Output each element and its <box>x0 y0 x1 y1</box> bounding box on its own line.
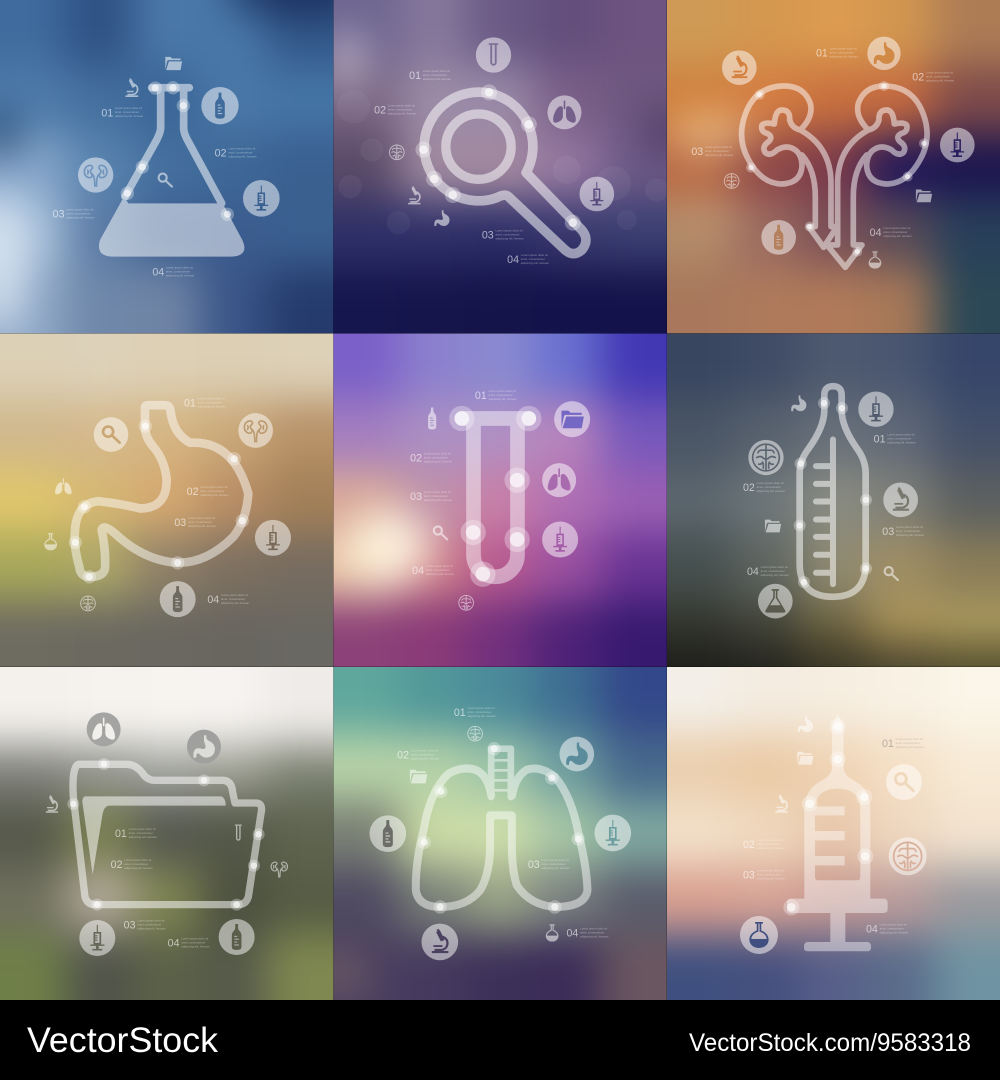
text: 04: amet, consectetuer <box>880 927 904 931</box>
diagram: test tube <box>462 418 529 577</box>
text: 03: amet, consectetuer <box>896 529 920 533</box>
text: 02: 02 <box>410 452 422 464</box>
text: 04: 04 <box>168 938 180 950</box>
text: 04 <box>870 226 912 239</box>
text: 01: amet, consectetuer <box>115 110 139 114</box>
text: 03: amet, consectetuer <box>188 520 212 524</box>
text: 02: Lorem ipsum dolor sit <box>926 70 953 74</box>
icon: brain <box>459 595 473 610</box>
icon: microscope <box>125 78 138 97</box>
text: 01: 01 <box>101 107 113 119</box>
diagram: syringe <box>787 714 888 951</box>
text: 01: amet, consectetuer <box>467 710 492 714</box>
icon: stomach <box>434 210 450 226</box>
text: 04: amet, consectetuer <box>580 930 604 934</box>
text: 02 <box>111 858 153 871</box>
nodes <box>415 84 581 231</box>
text: 03: Lorem ipsum dolor sit <box>495 229 523 233</box>
text: 04: adipiscing elit. Aenean <box>181 945 210 949</box>
text: 02: Lorem ipsum dolor sit <box>200 485 228 489</box>
badge: syringe <box>594 815 631 851</box>
icon: brain <box>389 145 404 160</box>
icon: stomach <box>798 716 813 732</box>
text: 01: amet, consectetuer <box>129 831 153 835</box>
text: 03: Lorem ipsum dolor sit <box>896 525 923 529</box>
text: 02: Lorem ipsum dolor sit <box>228 146 256 150</box>
text: 04: Lorem ipsum dolor sit <box>880 923 907 927</box>
text: 01: amet, consectetuer <box>887 436 911 440</box>
text: 03: adipiscing elit. Aenean <box>424 498 452 502</box>
text: 02: amet, consectetuer <box>926 74 950 78</box>
badge: test tube <box>476 37 511 73</box>
text: 02: 02 <box>111 859 123 871</box>
text: 03: Lorem ipsum dolor sit <box>137 919 165 923</box>
text: 03: Lorem ipsum dolor sit <box>541 858 569 862</box>
text: 03: amet, consectetuer <box>541 862 566 866</box>
icon: test tube <box>235 824 242 841</box>
text: 03: 03 <box>124 920 136 932</box>
text: 04: adipiscing elit. Aenean <box>426 572 454 576</box>
text: 04: Lorem ipsum dolor sit <box>221 593 248 597</box>
text: 03 <box>528 858 570 871</box>
text: 02: 02 <box>743 482 755 494</box>
text: 04 <box>566 926 609 939</box>
text: 02: 02 <box>743 839 755 851</box>
icon: microscope <box>775 795 788 813</box>
text: 03: 03 <box>882 526 894 538</box>
text: 03 <box>691 145 734 158</box>
text: 04: amet, consectetuer <box>166 270 190 274</box>
text: 01: adipiscing elit. Aenean <box>423 77 451 81</box>
text: 01: amet, consectetuer <box>198 400 222 404</box>
text: 02 <box>374 104 416 115</box>
badge: thermometer <box>219 919 255 955</box>
text: 04: Lorem ipsum dolor sit <box>166 266 193 270</box>
panel: lungs timeline <box>234 567 767 1080</box>
text: 01: Lorem ipsum dolor sit <box>115 106 142 110</box>
text: 02 <box>912 70 955 83</box>
text: 01: 01 <box>475 390 487 402</box>
text: 01: 01 <box>874 433 886 445</box>
icon: magnifier <box>159 174 172 187</box>
diagram: folder <box>73 764 262 905</box>
background: violet blur <box>234 234 767 767</box>
nodes <box>69 419 249 583</box>
text: 01: amet, consectetuer <box>423 73 447 77</box>
text: 01: Lorem ipsum dolor sit <box>423 69 450 73</box>
badge: microscope <box>883 482 918 517</box>
text: 01: amet, consectetuer <box>830 51 854 55</box>
text: 02: Lorem ipsum dolor sit <box>411 748 438 752</box>
text: 03 <box>410 490 452 503</box>
badge: kidneys <box>238 413 273 448</box>
text: 04: Lorem ipsum dolor sit <box>521 253 548 257</box>
text: 04 <box>508 254 549 264</box>
text: 02: amet, consectetuer <box>200 489 224 493</box>
panel: magnifier timeline <box>334 0 667 334</box>
text: 01: Lorem ipsum dolor sit <box>896 737 923 741</box>
icon: folder <box>410 770 427 783</box>
text: 01: amet, consectetuer <box>896 741 920 745</box>
badge: lungs <box>87 712 121 746</box>
text: 03: amet, consectetuer <box>705 149 729 153</box>
badge: folder <box>554 401 590 437</box>
text: 02: amet, consectetuer <box>757 485 781 489</box>
text: 01 <box>816 47 858 60</box>
text: 02: adipiscing elit. Aenean <box>228 154 257 158</box>
text: 03: Lorem ipsum dolor sit <box>757 869 784 873</box>
text: 01 <box>874 432 916 445</box>
text: 04: amet, consectetuer <box>221 597 245 601</box>
text: 04: 04 <box>507 254 519 266</box>
text: 01: 01 <box>882 738 894 750</box>
text: 04 <box>866 923 908 936</box>
badge: syringe <box>858 391 894 427</box>
text: 04 <box>168 937 210 950</box>
badge: magnifier <box>886 764 922 800</box>
text: 02: Lorem ipsum dolor sit <box>388 104 415 108</box>
text: 02 <box>187 485 229 498</box>
text: 02: amet, consectetuer <box>411 752 435 756</box>
text: 03: amet, consectetuer <box>137 923 161 927</box>
panel: thermometer timeline <box>567 234 1000 767</box>
text: 03: Lorem ipsum dolor sit <box>188 516 215 520</box>
footer: black watermark bar <box>0 1000 1000 1080</box>
text: 02: Lorem ipsum dolor sit <box>124 858 152 862</box>
text: 02 <box>743 481 785 494</box>
text: 01 <box>410 70 451 80</box>
text: 03 <box>174 516 217 529</box>
badge: brain <box>889 837 927 875</box>
background: blue blur <box>0 0 334 334</box>
badge: flask <box>758 584 793 618</box>
text: 03: 03 <box>691 146 703 158</box>
icon: folder <box>797 752 813 765</box>
text: 03: 03 <box>743 870 755 882</box>
text: 02 <box>410 451 452 464</box>
text: 04: 04 <box>747 566 759 578</box>
text: 04: adipiscing elit. Aenean <box>221 601 250 605</box>
text: 02: adipiscing elit. Aenean <box>757 489 785 493</box>
icon: lungs <box>55 478 72 494</box>
text: 04: Lorem ipsum dolor sit <box>761 565 788 569</box>
text: 03 <box>743 869 785 882</box>
text: 03: 03 <box>174 517 186 529</box>
text: 02: 02 <box>374 105 386 117</box>
icon: brain <box>81 596 95 611</box>
text: 03: 03 <box>482 230 494 242</box>
text: 03: Lorem ipsum dolor sit <box>424 490 451 494</box>
text: 01 <box>115 827 157 840</box>
background: orange blur <box>667 0 1000 334</box>
badge: thermometer <box>761 220 796 255</box>
icon: kidneys <box>271 862 287 877</box>
badge: syringe <box>579 177 614 211</box>
text: 01 <box>454 706 496 719</box>
icon: stomach <box>791 395 806 411</box>
badge: stomach <box>187 730 221 764</box>
text: 01: adipiscing elit. Aenean <box>887 440 916 444</box>
text: 02 <box>215 148 256 158</box>
text: 02: adipiscing elit. Aenean <box>424 459 452 463</box>
text: 02: adipiscing elit. Aenean <box>124 866 153 870</box>
text: 04: Lorem ipsum dolor sit <box>426 564 453 568</box>
footer brand: VectorStock <box>27 1021 219 1060</box>
panel: flask timeline <box>0 0 334 334</box>
badge: syringe <box>542 521 578 557</box>
icon: flask <box>546 924 558 942</box>
text: 02: amet, consectetuer <box>424 455 448 459</box>
text: 04: amet, consectetuer <box>181 941 205 945</box>
text: 02: 02 <box>215 147 227 159</box>
icon: thermometer <box>428 407 436 430</box>
text: 04 <box>747 565 789 578</box>
text: 04 <box>152 266 194 277</box>
text: 04: amet, consectetuer <box>426 568 450 572</box>
text: 02: amet, consectetuer <box>388 108 412 112</box>
text: 01 <box>882 737 924 750</box>
text: 04: 04 <box>207 594 219 606</box>
text: 04: adipiscing elit. Aenean <box>761 573 789 577</box>
background: tan blur <box>0 234 433 767</box>
nodes <box>121 81 234 221</box>
text: 03: Lorem ipsum dolor sit <box>66 208 94 212</box>
text: 03: amet, consectetuer <box>495 233 520 237</box>
text: 01: Lorem ipsum dolor sit <box>887 432 915 436</box>
icon: flask <box>869 251 881 269</box>
text: 02: amet, consectetuer <box>228 150 252 154</box>
text: 01: 01 <box>409 70 421 82</box>
badge: syringe <box>243 180 280 217</box>
text: 03: adipiscing elit. Aenean <box>541 866 570 870</box>
badge: thermometer <box>160 581 196 617</box>
text: 03: adipiscing elit. Aenean <box>188 524 217 528</box>
text: 04 <box>412 564 454 577</box>
text: 02: Lorem ipsum dolor sit <box>757 481 784 485</box>
badge: thermometer <box>201 87 239 124</box>
text: 02: 02 <box>397 749 409 761</box>
footer image id: VectorStock.com/9583318 <box>689 1029 971 1057</box>
diagram: kidneys <box>742 86 927 267</box>
diagram: flask <box>99 88 244 257</box>
icon: flask <box>44 533 57 550</box>
text: 04: amet, consectetuer <box>521 257 545 261</box>
panel: kidneys timeline <box>667 0 1000 334</box>
text: 03: adipiscing elit. Aenean <box>757 877 785 881</box>
badge: brain <box>748 440 784 475</box>
badge: kidneys <box>78 157 113 193</box>
text: 04: Lorem ipsum dolor sit <box>580 926 607 930</box>
text: 02: amet, consectetuer <box>124 862 148 866</box>
icon: magnifier <box>434 526 447 539</box>
icon: folder <box>165 57 182 70</box>
icon: brain <box>724 174 739 188</box>
background: slate blur <box>567 234 1000 767</box>
text: 03: adipiscing elit. Aenean <box>705 153 734 157</box>
text: 01 <box>475 389 517 402</box>
text: 01: 01 <box>454 707 466 719</box>
icon: folder <box>916 189 932 202</box>
text: 04: adipiscing elit. Aenean <box>880 931 908 935</box>
nodes <box>794 397 872 588</box>
badge: stomach <box>867 37 901 70</box>
icon: microscope <box>408 186 421 204</box>
badge: lungs <box>542 463 576 497</box>
badge: magnifier <box>94 417 128 452</box>
text: 04: 04 <box>412 565 424 577</box>
text: 04: adipiscing elit. Aenean <box>580 934 609 938</box>
text: 01: 01 <box>816 48 828 60</box>
badge: syringe <box>255 520 291 556</box>
text: 01: Lorem ipsum dolor sit <box>198 396 225 400</box>
panel: folder timeline <box>0 567 433 1080</box>
badge: syringe <box>940 128 975 162</box>
text: 03: amet, consectetuer <box>757 873 781 877</box>
diagram: lungs <box>416 749 587 907</box>
text: 01 <box>102 107 143 118</box>
nodes <box>783 718 873 915</box>
text: 01: 01 <box>115 828 127 840</box>
text: 04: amet, consectetuer <box>883 230 907 234</box>
text: 04 <box>207 593 250 606</box>
text: 02: Lorem ipsum dolor sit <box>757 838 784 842</box>
background: purple blur <box>334 0 667 334</box>
nodes <box>746 81 929 257</box>
badge: syringe <box>79 920 115 956</box>
text: 03: adipiscing elit. Aenean <box>495 237 524 241</box>
text: 04: Lorem ipsum dolor sit <box>883 226 911 230</box>
text: 03 <box>53 208 94 219</box>
text: 01: adipiscing elit. Aenean <box>129 835 157 839</box>
text: 03: 03 <box>410 491 422 503</box>
diagram: stomach <box>75 405 248 577</box>
text: 03: adipiscing elit. Aenean <box>896 533 925 537</box>
text: 01: Lorem ipsum dolor sit <box>467 706 495 710</box>
text: 03 <box>124 919 166 932</box>
text: 02: amet, consectetuer <box>757 842 781 846</box>
text: 04: adipiscing elit. Aenean <box>883 234 912 238</box>
text: 04: 04 <box>870 227 882 239</box>
text: 03: amet, consectetuer <box>66 212 90 216</box>
text: 01 <box>184 396 226 409</box>
icon: folder <box>765 520 781 532</box>
badge: thermometer <box>369 815 406 852</box>
nodes <box>67 758 265 911</box>
decorative bokeh <box>339 190 635 234</box>
panel: stomach timeline <box>0 234 433 767</box>
diagram: thermometer <box>800 386 866 597</box>
icon: microscope <box>46 795 58 813</box>
text: 02 <box>397 748 439 761</box>
background: peach blur <box>567 567 1000 1080</box>
text: 02: adipiscing elit. Aenean <box>411 756 439 760</box>
text: 01: Lorem ipsum dolor sit <box>129 827 156 831</box>
nodes <box>449 406 541 587</box>
text: 02: adipiscing elit. Aenean <box>926 78 955 82</box>
text: 04: 04 <box>866 924 878 936</box>
text: 04: amet, consectetuer <box>761 569 785 573</box>
background: green blur <box>0 567 433 1080</box>
badge: lungs <box>547 95 581 129</box>
text: 03: 03 <box>528 859 540 871</box>
diagram: magnifier <box>424 92 586 254</box>
badge: microscope <box>421 924 458 960</box>
icon: magnifier <box>885 567 898 580</box>
text: 01: adipiscing elit. Aenean <box>115 114 144 118</box>
text: 04: adipiscing elit. Aenean <box>166 274 195 278</box>
text: 03: adipiscing elit. Aenean <box>137 927 166 931</box>
text: 04: 04 <box>152 267 164 279</box>
text: 02: adipiscing elit. Aenean <box>757 846 785 850</box>
nodes <box>417 742 585 914</box>
text: 04: 04 <box>566 927 578 939</box>
text: 02: 02 <box>912 71 924 83</box>
text: 04: Lorem ipsum dolor sit <box>181 937 209 941</box>
panel: test tube timeline <box>234 234 767 767</box>
icon: brain <box>468 726 482 741</box>
text: 01: Lorem ipsum dolor sit <box>830 47 857 51</box>
text: 01: Lorem ipsum dolor sit <box>488 389 516 393</box>
panel: syringe timeline <box>567 567 1000 1080</box>
text: 03: adipiscing elit. Aenean <box>66 216 95 220</box>
text: 02: Lorem ipsum dolor sit <box>424 451 451 455</box>
text: 01: adipiscing elit. Aenean <box>467 714 496 718</box>
text: 01: 01 <box>184 397 196 409</box>
text: 04: adipiscing elit. Aenean <box>521 261 549 265</box>
text: 02: adipiscing elit. Aenean <box>388 112 416 116</box>
text: 02 <box>743 838 785 851</box>
text: 01: adipiscing elit. Aenean <box>488 397 517 401</box>
text: 01: amet, consectetuer <box>488 393 513 397</box>
text: 01: adipiscing elit. Aenean <box>830 55 858 59</box>
text: 03: 03 <box>53 209 65 221</box>
text: 01: adipiscing elit. Aenean <box>896 745 924 749</box>
text: 03 <box>882 525 925 538</box>
text: 03: amet, consectetuer <box>424 494 448 498</box>
text: 02: 02 <box>187 486 199 498</box>
text: 03 <box>482 230 524 240</box>
badge: flask <box>740 916 778 954</box>
text: 01: adipiscing elit. Aenean <box>198 404 226 408</box>
text: 03: Lorem ipsum dolor sit <box>705 145 732 149</box>
badge: microscope <box>722 50 757 85</box>
background: teal blur <box>234 567 767 1080</box>
badge: stomach <box>559 737 594 771</box>
text: 02: adipiscing elit. Aenean <box>200 493 229 497</box>
